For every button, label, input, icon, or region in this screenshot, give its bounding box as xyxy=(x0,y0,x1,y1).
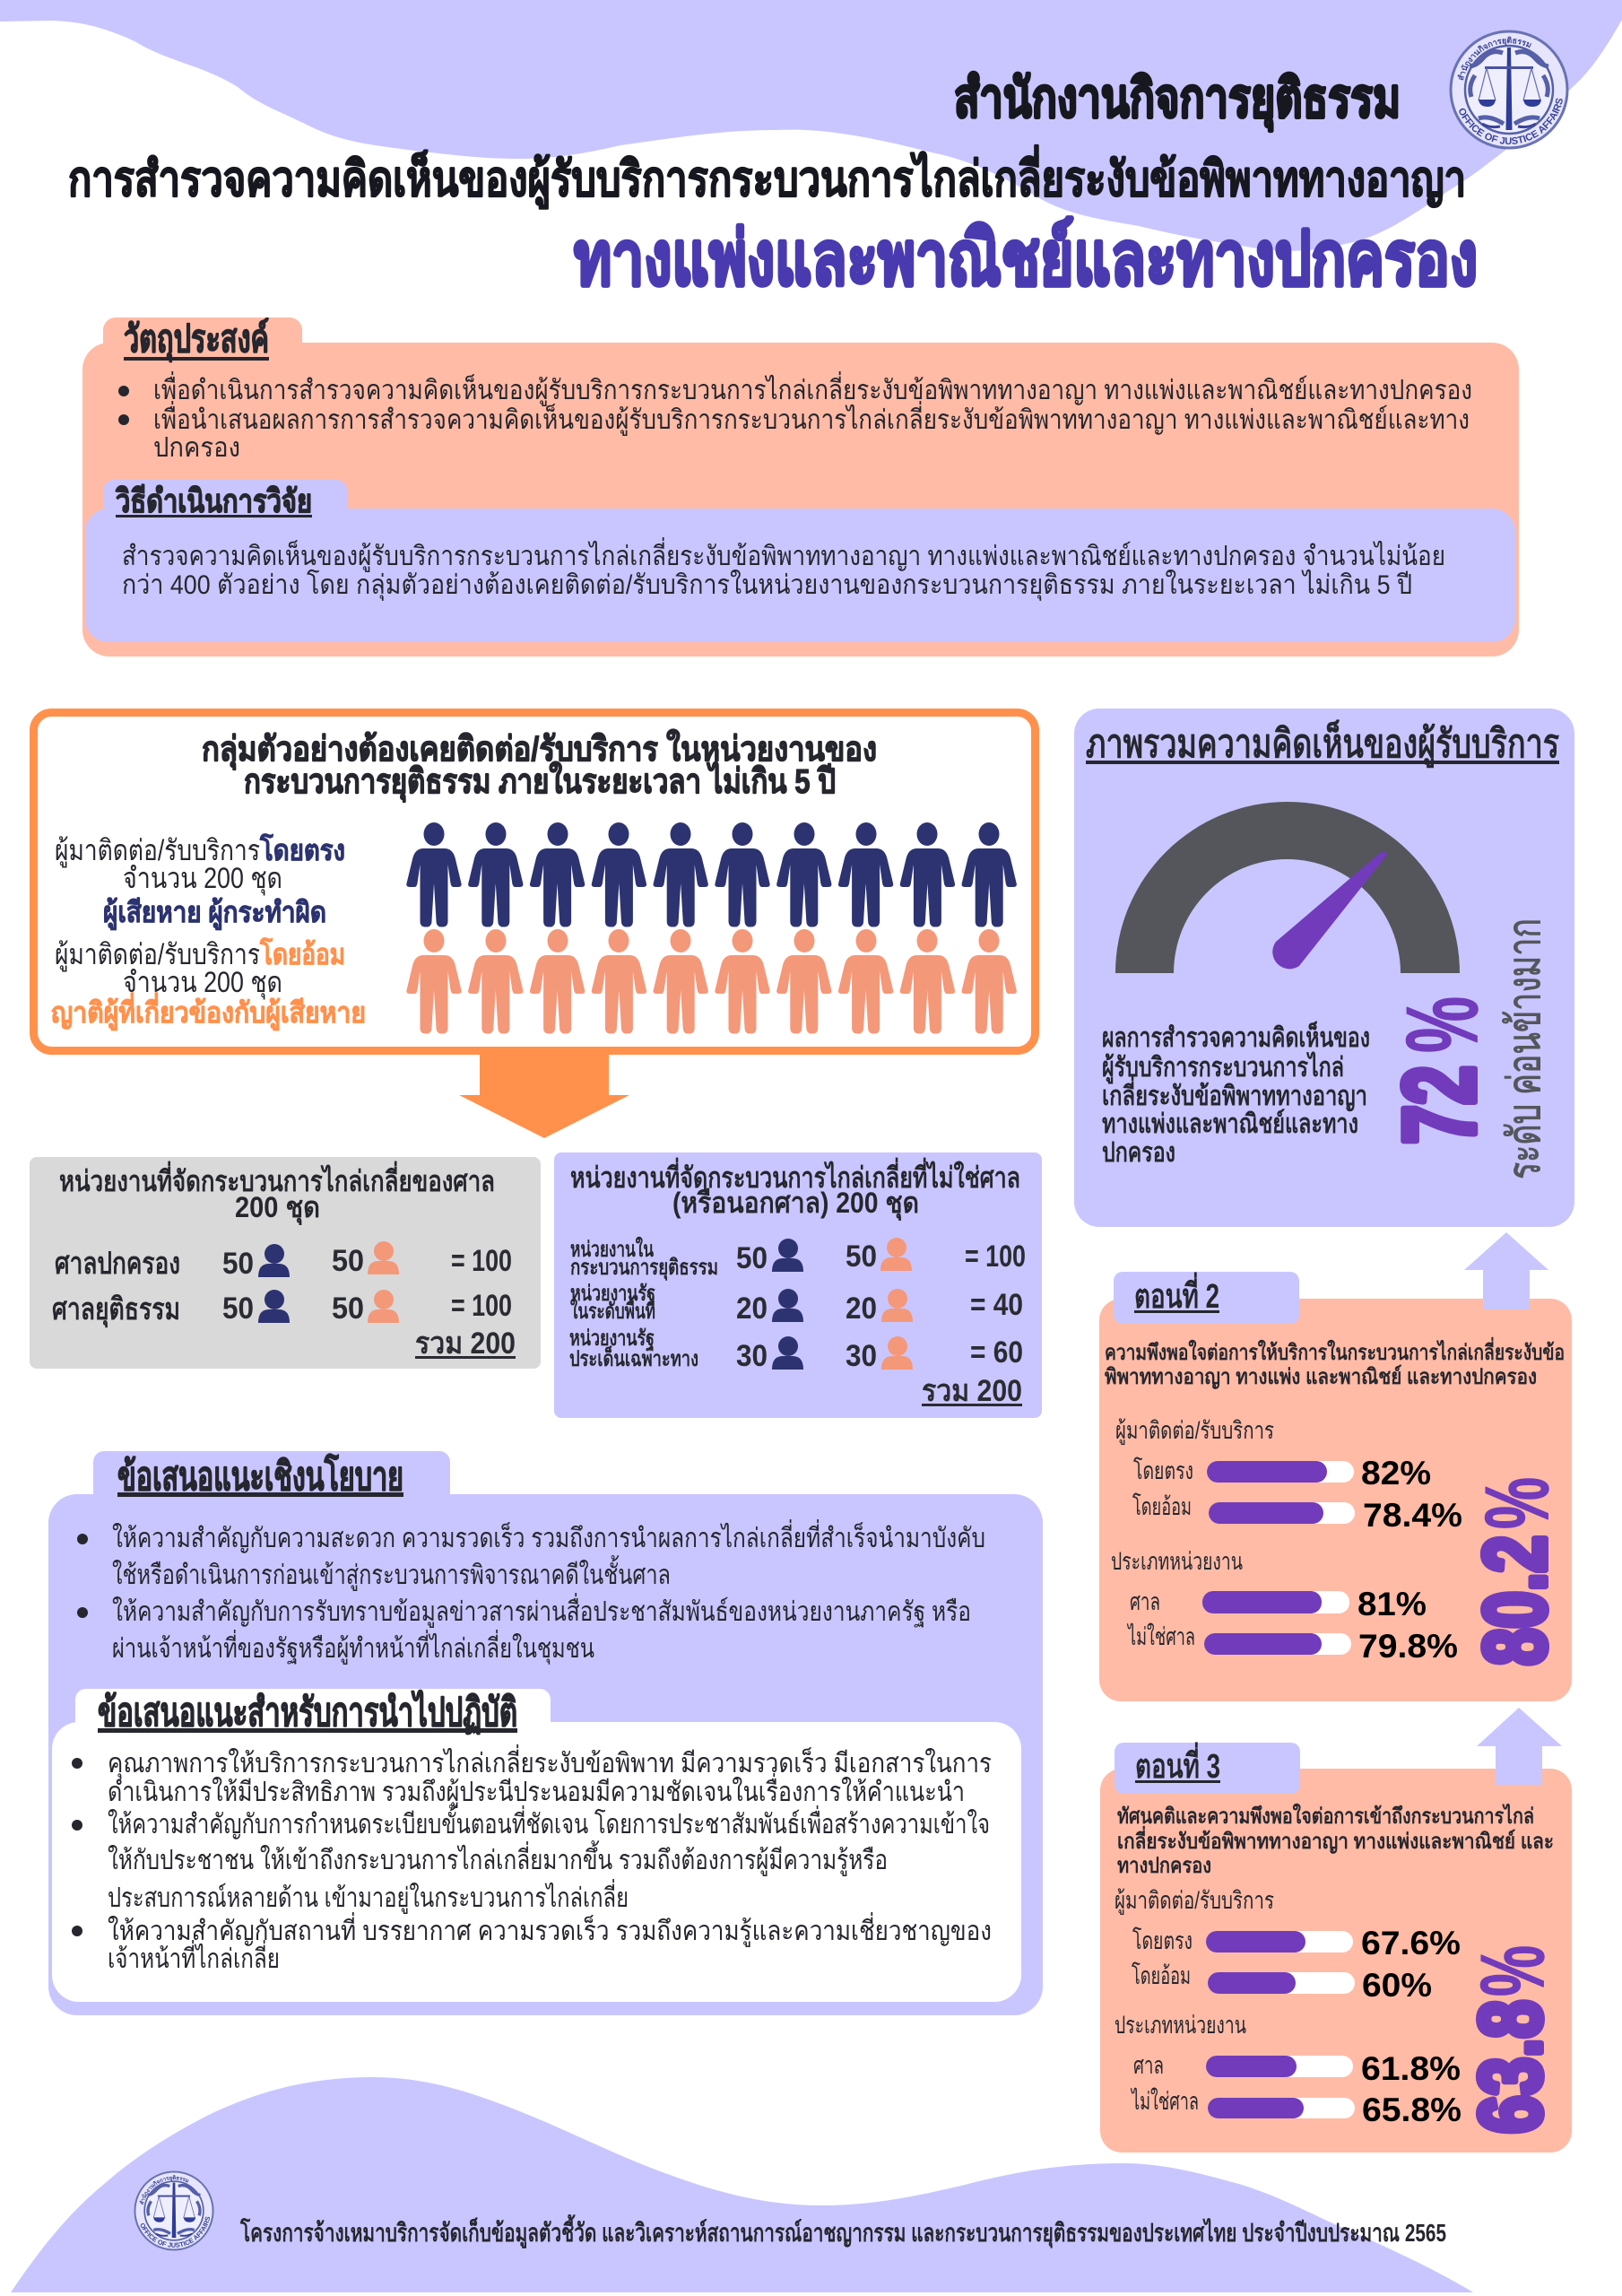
bar chart: part 3 contact type: 60% xyxy=(1362,1967,1432,2004)
text block: gauge description: ผลการสำรวจความคิดเห็นของ xyxy=(1102,1021,1370,1053)
icon: Office of Justice Affairs logo: OFFICE OF JUSTICE AFFAIRS xyxy=(1459,99,1563,144)
arrow: down xyxy=(459,1055,629,1138)
heading: objectives xyxy=(124,317,269,362)
text block: policy bullets: ให้ความสำคัญกับความสะดวก ความรวดเร็ว รวมถึงการนำผลการไกล่เกลี่ยที่สำเร็จนำมาบังคับ xyxy=(112,1519,985,1553)
text block: gauge description: ปกครอง xyxy=(1102,1138,1175,1168)
bar chart: part 3 contact type: โดยอ้อม xyxy=(1132,1962,1191,1989)
icon: footer logo xyxy=(134,2170,213,2251)
table row: specialized state units: 30 xyxy=(736,1339,768,1373)
panel: overview of opinions xyxy=(1074,709,1574,1227)
heading: policy recommendations: ข้อเสนอแนะเชิงนโยบาย xyxy=(117,1452,403,1499)
heading: part 3 xyxy=(1135,1742,1220,1786)
heading: court units: หน่วยงานที่จัดกระบวนการไกล่เกลี่ยของศาล xyxy=(59,1161,495,1197)
text block: indirect contact: ญาติผู้ที่เกี่ยวข้องกับผู้เสียหาย xyxy=(51,992,366,1031)
bar chart: part 3 contact type: 67.6% xyxy=(1361,1925,1461,1961)
table row: court of justice: = 100 xyxy=(451,1289,512,1323)
table row: local state units: = 40 xyxy=(970,1288,1023,1322)
bar chart: part 2 contact type: 82% xyxy=(1361,1455,1431,1492)
text block: direct contact: โดยตรง xyxy=(259,833,345,866)
bar chart: part 2 contact type: โดยตรง xyxy=(1133,1457,1193,1484)
bar chart: part 2 unit type: ไม่ใช่ศาล xyxy=(1127,1622,1195,1650)
label: rather high level: ระดับ ค่อนข้างมาก xyxy=(1499,918,1549,1179)
table row: justice process units: หน่วยงานใน xyxy=(570,1236,654,1262)
text block: indirect contact xyxy=(51,937,366,1031)
panel: policy recommendations xyxy=(48,1451,1043,2015)
table row: justice process units: กระบวนการยุติธรรม xyxy=(570,1256,718,1282)
text block: indirect contact: ผู้มาติดต่อ/รับบริการ xyxy=(55,938,260,972)
bar chart: part 3 unit type: ศาล xyxy=(1133,2052,1164,2079)
total: court units: รวม 200 xyxy=(415,1326,516,1361)
icon: footer logo: OFFICE OF JUSTICE AFFAIRS xyxy=(140,2217,210,2248)
bar chart: part 3 unit type: ประเภทหน่วยงาน xyxy=(1115,2012,1246,2039)
table row: administrative court: 50 xyxy=(332,1244,364,1278)
bar chart: part 2 unit type: ศาล xyxy=(1130,1588,1160,1615)
text block: part 3 description: เกลี่ยระงับข้อพิพาททางอาญา ทางแพ่งและพาณิชย์ และ xyxy=(1117,1825,1554,1854)
text block: part 3 description xyxy=(1117,1803,1554,1878)
figure: 80.2 percent: 80.2 xyxy=(1466,1535,1564,1665)
text block: part 3 description: ทัศนคติและความพึงพอใจต่อการเข้าถึงกระบวนการไกล่ xyxy=(1117,1803,1534,1829)
icon row: navy people xyxy=(406,822,1017,927)
sub-panel: research method: วิธีดำเนินการวิจัย xyxy=(115,483,312,519)
text block: direct contact: ผู้มาติดต่อ/รับบริการ xyxy=(55,834,260,868)
total: non-court units: รวม 200 xyxy=(922,1374,1022,1408)
text block: part 2 description xyxy=(1105,1336,1565,1389)
sub-panel: practical recommendations xyxy=(52,1689,1021,2002)
text block: gauge description: ผู้รับบริการกระบวนการไกล่ xyxy=(1102,1051,1344,1084)
bar chart: part 2 unit type: 81% xyxy=(1357,1586,1427,1622)
sub-panel: practical recommendations: ให้ความสำคัญกับสถานที่ บรรยากาศ ความรวดเร็ว รวมถึงความรู้และความเชี่ยวชาญของ xyxy=(108,1912,992,1947)
panel: non-court mediation units xyxy=(554,1152,1042,1418)
figure: 72 percent: % xyxy=(1385,996,1498,1053)
bar chart: part 3 contact type: ผู้มาติดต่อ/รับบริการ xyxy=(1115,1887,1274,1915)
panel: sample group xyxy=(34,712,1035,1051)
text block: part 2 description: พิพาททางอาญา ทางแพ่ง และพาณิชย์ และทางปกครอง xyxy=(1105,1364,1537,1389)
icon: Office of Justice Affairs logo xyxy=(1449,30,1569,149)
text block: policy bullets: ให้ความสำคัญกับการรับทราบข้อมูลข่าวสารผ่านสื่อประชาสัมพันธ์ของหน่วยงานภาครัฐ หรือ xyxy=(112,1593,971,1628)
heading: objectives: วัตถุประสงค์ xyxy=(124,317,269,362)
bar chart: part 2 contact type xyxy=(1115,1417,1462,1534)
panel: objectives and method xyxy=(82,317,1519,657)
sub-panel: practical recommendations: ข้อเสนอแนะสำหรับการนำไปปฏิบัติ xyxy=(98,1689,517,1735)
table row: local state units: 20 xyxy=(846,1292,877,1326)
heading: sample group: กระบวนการยุติธรรม ภายในระยะเวลา ไม่เกิน 5 ปี xyxy=(244,761,836,803)
sub-panel: practical recommendations: เจ้าหน้าที่ไกล่เกลี่ย xyxy=(108,1940,280,1974)
heading: court units: 200 ชุด xyxy=(235,1191,320,1226)
heading: part 2: ตอนที่ 2 xyxy=(1134,1272,1219,1316)
icon row: salmon people xyxy=(406,929,1017,1033)
table row: specialized state units: ประเด็นเฉพาะทาง xyxy=(569,1345,698,1371)
table row: administrative court: ศาลปกครอง xyxy=(55,1247,180,1281)
chart: gauge xyxy=(1115,802,1460,973)
figure: 63.8 percent: 63.8 xyxy=(1462,2000,1559,2134)
text block: objectives xyxy=(118,371,1472,463)
bar chart: part 2 contact type: ผู้มาติดต่อ/รับบริการ xyxy=(1115,1417,1274,1445)
text block: indirect contact: โดยอ้อม xyxy=(259,937,345,970)
heading: policy recommendations xyxy=(117,1452,403,1499)
sub-panel: practical recommendations: ดำเนินการให้มีประสิทธิภาพ รวมถึงผู้ประนีประนอมมีความชัดเจนในเรื่องการให้คำแนะนำ xyxy=(108,1773,965,1808)
bottom background wave xyxy=(11,2077,1473,2292)
table row: court of justice: 50 xyxy=(332,1292,364,1326)
heading: non-court units: หน่วยงานที่จัดกระบวนการไกล่เกลี่ยที่ไม่ใช่ศาล xyxy=(570,1157,1020,1194)
text block: objectives: ปกครอง xyxy=(153,433,240,463)
bar chart: part 3 contact type: โดยตรง xyxy=(1132,1927,1193,1954)
text block: indirect contact: จำนวน 200 ชุด xyxy=(123,966,282,1000)
table row: justice process units: = 100 xyxy=(965,1239,1026,1274)
bar chart: part 3 unit type: 61.8% xyxy=(1361,2050,1461,2087)
text block: gauge description: ทางแพ่งและพาณิชย์และทาง xyxy=(1102,1109,1358,1139)
table row: justice process units: 50 xyxy=(846,1239,877,1274)
icon: Office of Justice Affairs logo: สำนักงานกิจการยุติธรรม xyxy=(1458,36,1531,81)
panel: court mediation units xyxy=(30,1157,541,1369)
icon: footer logo: สำนักงานกิจการยุติธรรม xyxy=(140,2175,188,2205)
table row: justice process units: 50 xyxy=(736,1241,768,1275)
text block: part 3 description: ทางปกครอง xyxy=(1117,1854,1211,1878)
bar chart: part 3 unit type xyxy=(1115,2012,1462,2128)
table row: administrative court: = 100 xyxy=(451,1244,512,1278)
sub-panel: practical recommendations: คุณภาพการให้บริการกระบวนการไกล่เกลี่ยระงับข้อพิพาท มีความรวดเร็ว มีเอกสารในการ xyxy=(108,1744,992,1780)
heading: non-court units: (หรือนอกศาล) 200 ชุด xyxy=(672,1187,919,1222)
table row: specialized state units: หน่วยงานรัฐ xyxy=(569,1326,655,1352)
sub-panel: research method: กว่า 400 ตัวอย่าง โดย กลุ่มตัวอย่างต้องเคยติดต่อ/รับบริการในหน่วยงานของกระบวนการยุติธรรม ภายในระยะเวลา ไม่เกิน 5 ปี xyxy=(122,569,1412,602)
table row: justice process units xyxy=(570,1236,1026,1282)
arrow: up from part 3 xyxy=(1477,1708,1562,1785)
table row: local state units: ในระดับพื้นที่ xyxy=(570,1294,655,1324)
heading: sample group: กลุ่มตัวอย่างต้องเคยติดต่อ/รับบริการ ในหน่วยงานของ xyxy=(202,729,877,770)
text block: policy bullets: ผ่านเจ้าหน้าที่ของรัฐหรือผู้ทำหน้าที่ไกล่เกลี่ยในชุมชน xyxy=(112,1630,594,1665)
bar chart: part 3 unit type: ไม่ใช่ศาล xyxy=(1131,2087,1199,2115)
table row: court of justice: 50 xyxy=(222,1292,254,1326)
table row: specialized state units xyxy=(569,1326,1023,1373)
table row: local state units xyxy=(570,1282,1023,1326)
bar chart: part 2 contact type: โดยอ้อม xyxy=(1132,1493,1192,1520)
bar chart: part 2 unit type: 79.8% xyxy=(1358,1628,1458,1665)
text block: policy bullets: ใช้หรือดำเนินการก่อนเข้าสู่กระบวนการพิจารณาคดีในชั้นศาล xyxy=(112,1555,671,1591)
heading: court units xyxy=(59,1161,495,1226)
heading: part 2 xyxy=(1134,1272,1219,1316)
text block: direct contact xyxy=(55,833,345,931)
arrow: up from part 2 xyxy=(1464,1232,1548,1309)
bar chart: part 2 unit type: ประเภทหน่วยงาน xyxy=(1111,1548,1243,1575)
bar chart: part 2 contact type: 78.4% xyxy=(1363,1497,1462,1534)
heading: part 3: ตอนที่ 3 xyxy=(1135,1742,1220,1786)
top background wave xyxy=(0,0,1622,251)
title: office name: สำนักงานกิจการยุติธรรม xyxy=(954,68,1401,132)
text block: direct contact: จำนวน 200 ชุด xyxy=(123,862,282,896)
table row: court of justice: ศาลยุติธรรม xyxy=(52,1292,180,1328)
sub-panel: research method xyxy=(85,480,1515,642)
sub-panel: practical recommendations: ให้กับประชาชน ให้เข้าถึงกระบวนการไกล่เกลี่ยมากขึ้น รวมถึงต้องการผู้มีความรู้หรือ xyxy=(108,1840,888,1876)
panel: part 3 attitude xyxy=(1100,1742,1572,2152)
figure: 72 percent: 72 xyxy=(1383,1065,1496,1144)
bar chart: part 3 unit type: 65.8% xyxy=(1362,2092,1462,2128)
heading: non-court units xyxy=(570,1157,1020,1222)
figure: 63.8 percent: % xyxy=(1462,1945,1563,1996)
table row: administrative court: 50 xyxy=(222,1247,254,1281)
table row: administrative court xyxy=(55,1241,512,1281)
bar chart: part 2 unit type xyxy=(1111,1548,1458,1665)
heading: sample group xyxy=(202,729,877,803)
figure: 80.2 percent: % xyxy=(1467,1477,1567,1529)
text block: gauge description xyxy=(1102,1021,1370,1168)
text block: gauge description: เกลี่ยระงับข้อพิพาททางอาญา xyxy=(1102,1076,1367,1112)
sub-panel: research method: สำรวจความคิดเห็นของผู้รับบริการกระบวนการไกล่เกลี่ยระงับข้อพิพาททางอาญา ทางแพ่งและพาณิชย์และทางปกครอง จำนวนไม่น้อย xyxy=(122,537,1445,572)
sub-panel: practical recommendations: ประสบการณ์หลายด้าน เข้ามาอยู่ในกระบวนการไกล่เกลี่ย xyxy=(108,1879,629,1914)
text block: direct contact: ผู้เสียหาย ผู้กระทำผิด xyxy=(103,896,326,931)
table row: specialized state units: = 60 xyxy=(970,1335,1023,1370)
sub-panel: practical recommendations: ให้ความสำคัญกับการกำหนดระเบียบขั้นตอนที่ชัดเจน โดยการประชาสัมพันธ์เพื่อสร้างความเข้าใจ xyxy=(108,1805,990,1839)
table row: local state units: 20 xyxy=(736,1292,768,1326)
table row: specialized state units: 30 xyxy=(846,1339,877,1373)
panel: part 2 satisfaction xyxy=(1099,1272,1572,1701)
table row: court of justice xyxy=(52,1289,512,1328)
table row: local state units: หน่วยงานรัฐ xyxy=(570,1282,655,1308)
text block: policy bullets xyxy=(77,1519,985,1665)
bar chart: part 3 contact type xyxy=(1115,1887,1461,2004)
